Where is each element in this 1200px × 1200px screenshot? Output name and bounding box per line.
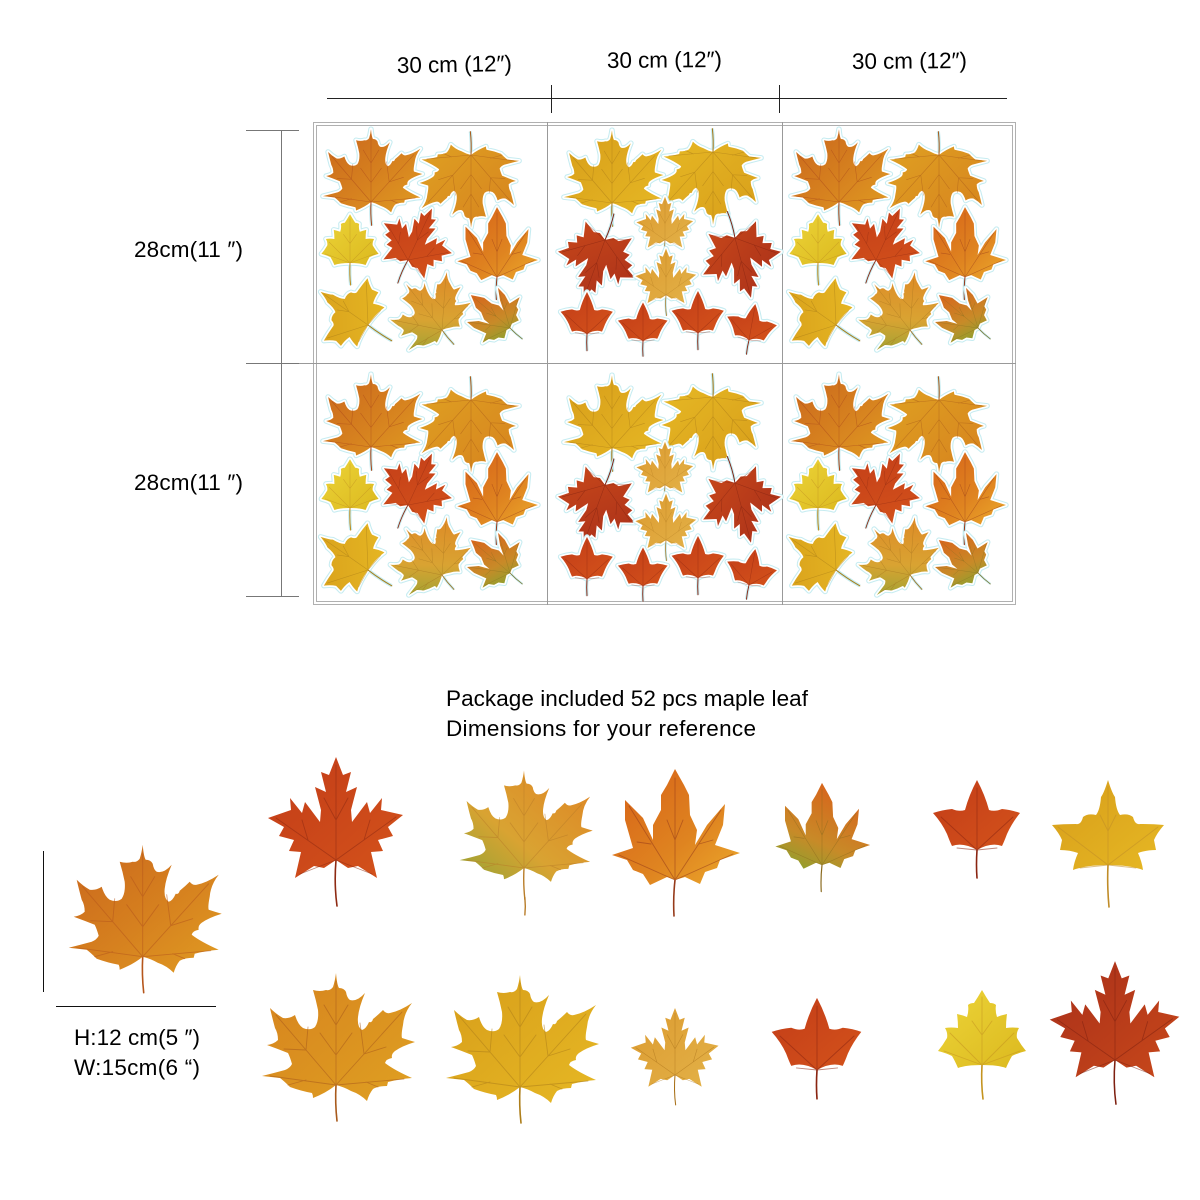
sticker panel: row 2 column 2	[546, 374, 790, 604]
top dimension labels	[397, 47, 967, 78]
sample leaf with size guides	[44, 845, 222, 1080]
sticker: small gold leaf lower	[635, 249, 696, 316]
size text: W:15cm(6 “)	[74, 1055, 200, 1080]
height guide line	[42, 851, 44, 992]
top dimension labels: 30 cm (12″)	[852, 48, 967, 74]
sticker: small orange and green leaf	[452, 272, 542, 361]
icon: reference maple leaf	[69, 845, 222, 993]
leaf: red jagged	[268, 757, 403, 906]
top dimension labels: 30 cm (12″)	[607, 47, 722, 73]
sticker: gold maple leaf inverted	[662, 129, 761, 225]
side dimension labels	[134, 237, 243, 495]
top dimension line	[327, 85, 1007, 113]
sticker: yellow rounded leaf	[321, 214, 379, 285]
leaf: small red	[933, 780, 1020, 878]
package description text: Package included 52 pcs maple leaf	[446, 686, 809, 711]
sticker: orange maple leaf	[323, 129, 422, 225]
sticker: small gold leaf upper	[636, 197, 693, 259]
sticker: red jagged leaf	[363, 193, 465, 299]
sticker panel: row 1 column 2	[546, 129, 790, 359]
leaf: gold large	[446, 975, 599, 1123]
package description text	[446, 686, 809, 741]
sticker: gold maple leaf	[564, 130, 663, 226]
width guide line	[56, 1006, 216, 1008]
side dimension labels: 28cm(11 ″)	[134, 237, 243, 262]
sticker panel: row 1 column 3	[767, 129, 1010, 373]
sticker: red leaf right	[689, 201, 790, 308]
side dimension labels: 28cm(11 ″)	[134, 470, 243, 495]
sticker: amber maple leaf inverted	[420, 132, 519, 228]
sticker: red simple leaf 4	[721, 300, 780, 359]
leaf: red simple	[772, 998, 861, 1099]
size text: H:12 cm(5 ″)	[74, 1025, 200, 1050]
sticker: red simple leaf 2	[618, 302, 668, 356]
sticker panel: row 2 column 3	[767, 374, 1010, 618]
sticker: red leaf left	[546, 200, 653, 312]
top dimension labels: 30 cm (12″)	[397, 51, 512, 78]
leaf: amber large	[262, 973, 415, 1121]
size text	[74, 1025, 200, 1080]
leaf: small gold	[631, 1008, 719, 1105]
sticker: green and amber leaf	[376, 259, 486, 368]
sticker sheet frame	[299, 122, 1016, 605]
sticker: red simple leaf 3	[672, 291, 724, 350]
sticker: red simple leaf 1	[561, 292, 613, 351]
leaf: yellow rounded	[938, 990, 1026, 1099]
sticker: orange fingered leaf	[457, 207, 538, 300]
leaf: small orange and green	[775, 783, 870, 892]
sticker panel: row 1 column 1	[299, 129, 542, 373]
sticker: yellow tilted leaf	[299, 261, 413, 373]
side dimension line	[246, 130, 299, 597]
leaf: orange fingered	[612, 769, 740, 916]
package description text: Dimensions for your reference	[446, 716, 756, 741]
leaf: dark red large	[1050, 961, 1179, 1104]
sticker panel: row 2 column 1	[299, 374, 542, 618]
leaf: green and amber	[460, 771, 593, 915]
leaf: yellow wide	[1052, 780, 1164, 907]
